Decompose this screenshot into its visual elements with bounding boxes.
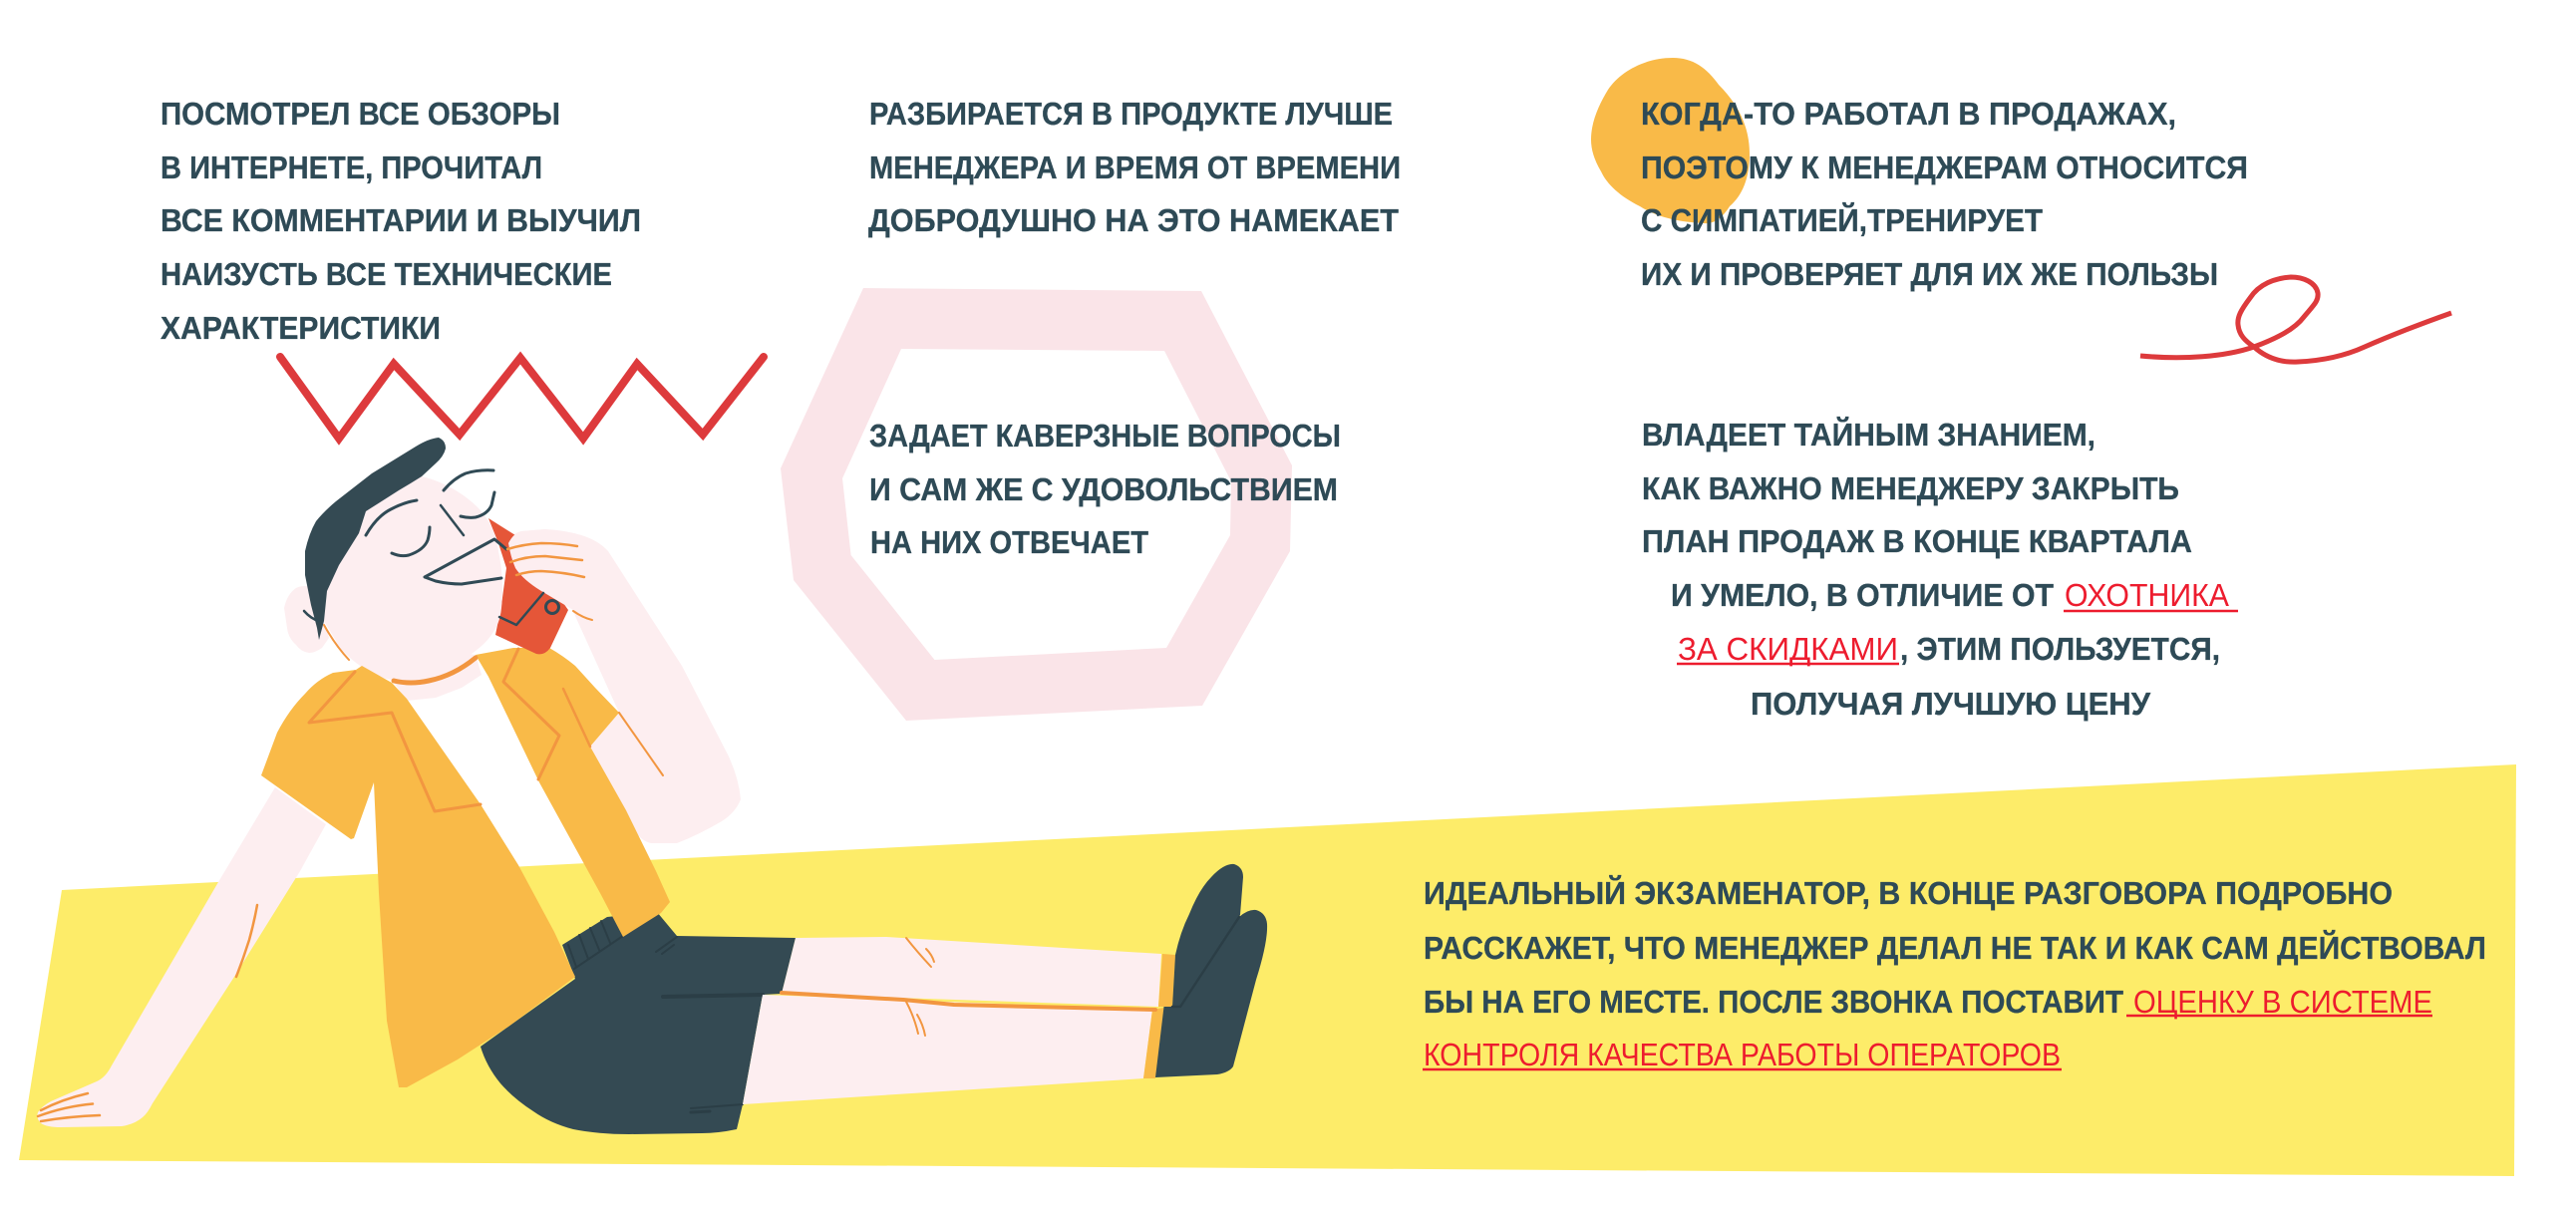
decorative red scribble loop — [2140, 277, 2451, 362]
shirt: right side — [476, 648, 670, 937]
text block: reviews: В ИНТЕРНЕТЕ, ПРОЧИТАЛ — [161, 150, 542, 185]
panel: yellow mat — [19, 764, 2516, 1176]
front shoe — [1155, 910, 1267, 1077]
text block: worked in sales — [1641, 96, 2248, 292]
text block: secret knowledge: КАК ВАЖНО МЕНЕДЖЕРУ ЗАКРЫТЬ — [1642, 470, 2179, 506]
hand over phone — [508, 529, 618, 610]
text block: worked in sales: С СИМПАТИЕЙ,ТРЕНИРУЕТ — [1641, 202, 2043, 238]
text block: worked in sales: ИХ И ПРОВЕРЯЕТ ДЛЯ ИХ ЖЕ ПОЛЬЗЫ — [1641, 256, 2218, 292]
illustration: man on the phone — [37, 438, 1267, 1134]
text block: knows product: ДОБРОДУШНО НА ЭТО НАМЕКАЕТ — [868, 202, 1399, 238]
text block: knows product — [868, 96, 1401, 238]
text block: tricky questions: ЗАДАЕТ КАВЕРЗНЫЕ ВОПРОСЫ — [869, 418, 1341, 453]
face features — [304, 470, 558, 625]
text block: secret knowledge: ОХОТНИКА — [2065, 577, 2230, 613]
text block: reviews: НАИЗУСТЬ ВСЕ ТЕХНИЧЕСКИЕ — [161, 256, 612, 292]
text block: ideal examiner: ИДЕАЛЬНЫЙ ЭКЗАМЕНАТОР, В КОНЦЕ РАЗГОВОРА ПОДРОБНО — [1424, 875, 2393, 911]
text block: secret knowledge: ВЛАДЕЕТ ТАЙНЫМ ЗНАНИЕМ, — [1642, 417, 2095, 453]
text block: secret knowledge: ПОЛУЧАЯ ЛУЧШУЮ ЦЕНУ — [1751, 686, 2151, 722]
text block: ideal examiner: КОНТРОЛЯ КАЧЕСТВА РАБОТЫ ОПЕРАТОРОВ — [1424, 1037, 2061, 1072]
face — [309, 476, 502, 680]
leg line and knee creases — [782, 938, 1155, 1036]
top leg — [782, 937, 1161, 1007]
text block: reviews: ПОСМОТРЕЛ ВСЕ ОБЗОРЫ — [161, 96, 560, 132]
text block: knows product: МЕНЕДЖЕРА И ВРЕМЯ ОТ ВРЕМЕНИ — [869, 150, 1401, 185]
shirt: left side — [261, 666, 575, 1087]
right shirt seams — [503, 649, 590, 779]
text block: reviews — [161, 96, 641, 346]
text block: secret knowledge: , ЭТИМ ПОЛЬЗУЕТСЯ, — [1900, 631, 2220, 667]
shorts folds — [568, 921, 763, 1112]
text block: secret knowledge: ЗА СКИДКАМИ — [1678, 631, 1898, 667]
text block: secret knowledge: ПЛАН ПРОДАЖ В КОНЦЕ КВАРТАЛА — [1642, 523, 2192, 559]
text block: knows product: РАЗБИРАЕТСЯ В ПРОДУКТЕ ЛУЧШЕ — [869, 96, 1393, 132]
text block: worked in sales: КОГДА-ТО РАБОТАЛ В ПРОДАЖАХ, — [1641, 96, 2176, 132]
back shoe — [1172, 864, 1243, 1007]
text block: ideal examiner: БЫ НА ЕГО МЕСТЕ. ПОСЛЕ ЗВОНКА ПОСТАВИТ — [1424, 984, 2123, 1020]
text block: ideal examiner: РАССКАЖЕТ, ЧТО МЕНЕДЖЕР ДЕЛАЛ НЕ ТАК И КАК САМ ДЕЙСТВОВАЛ — [1424, 930, 2486, 966]
neck — [392, 648, 482, 701]
decorative orange blob — [1591, 58, 1750, 223]
left arm — [37, 787, 326, 1127]
text block: tricky questions — [869, 418, 1341, 560]
text block: ideal examiner — [1423, 875, 2486, 1072]
raised arm — [508, 529, 741, 843]
bottom leg — [743, 995, 1152, 1104]
left shirt seams — [309, 672, 481, 811]
ear — [284, 586, 329, 653]
shorts — [481, 912, 796, 1134]
socks — [1143, 954, 1175, 1078]
neckline — [394, 658, 476, 683]
decorative pink hexagon ring — [781, 288, 1292, 721]
phone — [488, 518, 568, 654]
text block: worked in sales: ПОЭТОМУ К МЕНЕДЖЕРАМ ОТНОСИТСЯ — [1641, 150, 2248, 185]
left arm creases and fingers — [38, 905, 257, 1121]
text block: reviews: ХАРАКТЕРИСТИКИ — [161, 310, 441, 346]
text block: ideal examiner: ОЦЕНКУ В СИСТЕМЕ — [2133, 984, 2432, 1020]
finger and jaw lines — [324, 543, 663, 775]
text block: secret knowledge — [1642, 417, 2238, 722]
text block: secret knowledge: И УМЕЛО, В ОТЛИЧИЕ ОТ — [1671, 577, 2054, 613]
text block: tricky questions: НА НИХ ОТВЕЧАЕТ — [870, 524, 1148, 560]
text block: tricky questions: И САМ ЖЕ С УДОВОЛЬСТВИЕМ — [869, 471, 1338, 507]
shoe divider line — [1172, 917, 1239, 1007]
text block: reviews: ВСЕ КОММЕНТАРИИ И ВЫУЧИЛ — [161, 202, 641, 238]
decorative red zigzag — [280, 357, 764, 439]
hair — [305, 438, 446, 640]
